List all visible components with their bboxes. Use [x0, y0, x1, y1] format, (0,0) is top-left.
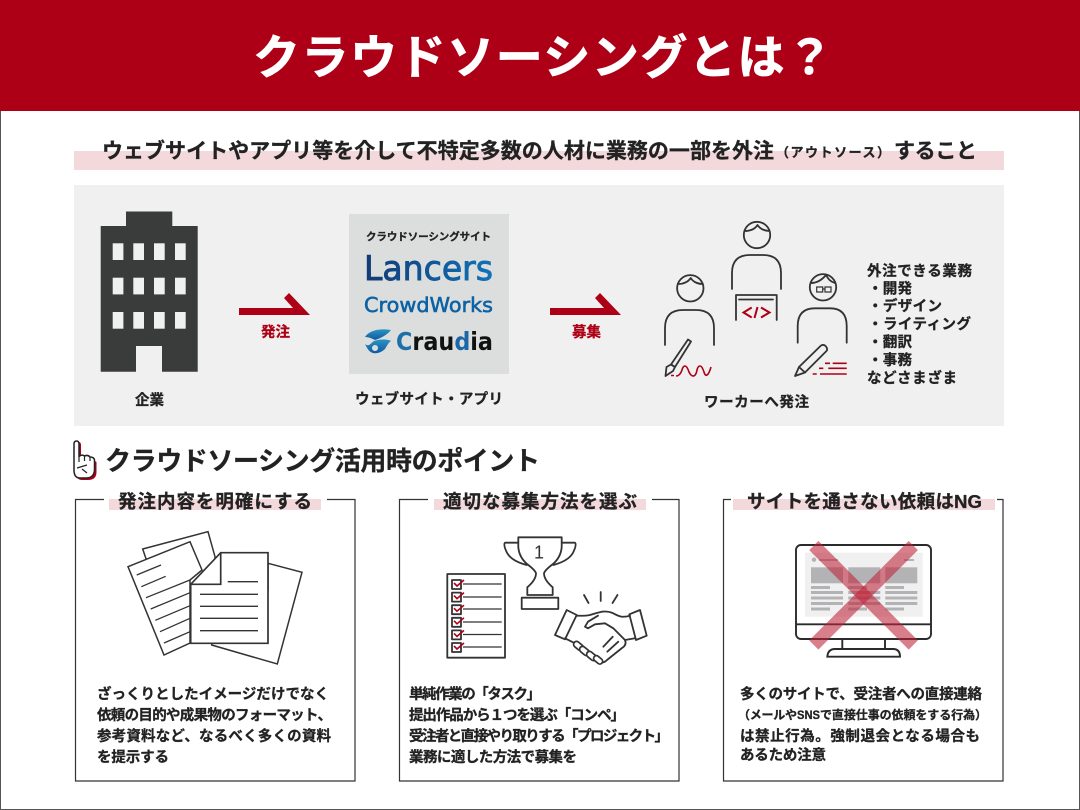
- subtitle definition: ウェブサイトやアプリ等を介して不特定多数の人材に業務の一部を外注: [102, 139, 774, 163]
- arrow: order: [239, 293, 310, 341]
- heading: points: クラウドソーシング活用時のポイント: [105, 446, 540, 476]
- icon: workers: [665, 222, 847, 376]
- panel: no off-site requests: [724, 491, 1003, 781]
- panel: clarify order: [76, 491, 355, 781]
- icon: checklist: [447, 574, 505, 658]
- worker with pencil: [795, 274, 847, 376]
- panel: choose recruiting method: [400, 491, 679, 781]
- body text: あるため注意: [740, 746, 826, 764]
- body text: を提示する: [97, 749, 169, 766]
- logo: CrowdWorks: CrowdWorks: [364, 293, 493, 317]
- subtitle definition: [74, 139, 1004, 170]
- panel: crowdsourcing sites: クラウドソーシングサイト: [366, 230, 491, 243]
- body text: SNS: [797, 708, 820, 722]
- icon: handshake: [555, 592, 647, 665]
- logo: Lancers: Lancers: [364, 249, 493, 289]
- body text: 業務に適した方法で募集を: [409, 748, 577, 766]
- body text: [738, 685, 987, 764]
- icon: trophy: 1: [534, 542, 544, 562]
- body text: 依頼の目的や成果物のフォーマット、: [97, 706, 332, 724]
- icon: company building: [101, 212, 198, 372]
- label: website and app: ウェブサイト・アプリ: [355, 390, 503, 408]
- card title: サイトを通さない依頼は: [747, 491, 954, 512]
- icon: pointing hand: [74, 441, 96, 480]
- list: outsourceable tasks: 外注できる業務: [867, 262, 972, 280]
- icon: trophy: [504, 537, 576, 609]
- body text: は禁止行為。強制退会となる場合も: [740, 727, 980, 745]
- arrow: order: 発注: [261, 323, 290, 341]
- body text: 受注者と直接やり取りする「プロジェクト」: [409, 727, 669, 745]
- logo: Craudia: Craudia: [396, 327, 493, 356]
- arrow: recruit: [550, 293, 621, 341]
- card title: NG: [954, 491, 982, 512]
- label: company: 企業: [135, 391, 164, 409]
- body text: 提出作品から１つを選ぶ「コンペ」: [409, 707, 625, 724]
- body text: （メールや: [738, 708, 797, 722]
- list: outsourceable tasks: ・ライティング: [868, 315, 972, 333]
- title: クラウドソーシングとは？: [253, 31, 833, 84]
- body text: 多くのサイトで、受注者への直接連絡: [740, 685, 982, 703]
- list: outsourceable tasks: ・事務: [868, 351, 912, 369]
- list: outsourceable tasks: [867, 262, 972, 387]
- body text: 参考資料など、なるべく多くの資料: [97, 727, 332, 745]
- worker with laptop: [732, 222, 781, 320]
- body text: ざっくりとしたイメージだけでなく: [97, 685, 329, 703]
- panel: crowdsourcing flow: [74, 185, 1004, 426]
- header banner: [0, 0, 1080, 111]
- body text: [409, 685, 669, 766]
- body text: [97, 685, 332, 766]
- subtitle definition: （アウトソース）: [776, 145, 890, 160]
- list: outsourceable tasks: ・翻訳: [868, 334, 912, 351]
- icon: documents: [128, 532, 302, 664]
- list: outsourceable tasks: ・デザイン: [868, 297, 942, 315]
- list: outsourceable tasks: ・開発: [868, 280, 912, 298]
- arrow: recruit: 募集: [572, 323, 601, 341]
- icon: crossed-out monitor: [796, 545, 931, 657]
- card title: 適切な募集方法を選ぶ: [443, 491, 637, 512]
- subtitle definition: すること: [894, 140, 977, 163]
- label: order to workers: ワーカーへ発注: [704, 393, 810, 411]
- card title: 発注内容を明確にする: [118, 491, 312, 512]
- body text: で直接仕事の依頼をする行為）: [820, 707, 987, 722]
- list: outsourceable tasks: などさまざま: [867, 369, 957, 387]
- panel: crowdsourcing sites: [349, 214, 509, 374]
- worker with pen: [665, 275, 714, 376]
- body text: 単純作業の「タスク」: [409, 685, 541, 703]
